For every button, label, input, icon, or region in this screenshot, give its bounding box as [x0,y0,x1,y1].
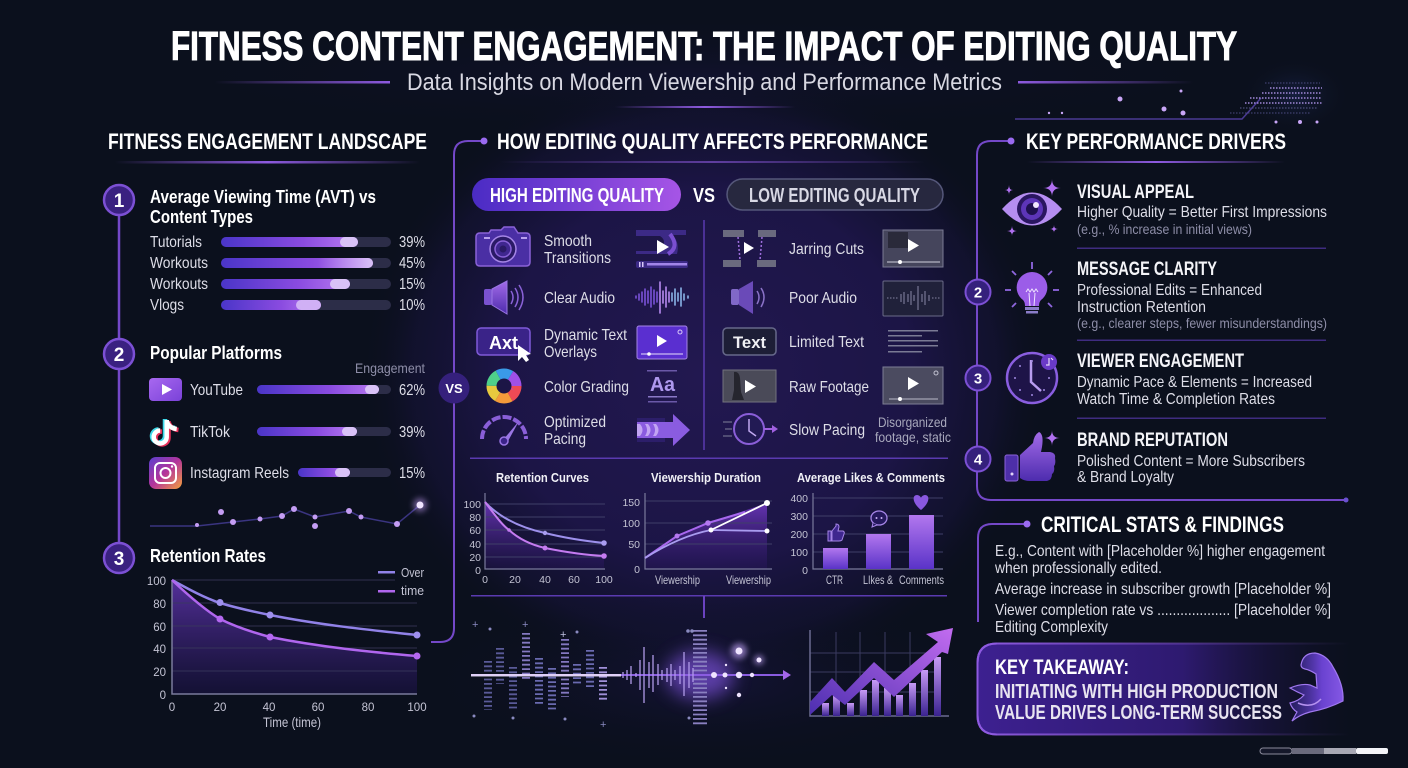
progress bar [1260,748,1388,754]
section: popular platforms: 15% [399,465,425,482]
chart: retention curves: 100 [595,574,613,586]
chart: retention curves: 80 [469,512,481,524]
section: popular platforms: Engagement [355,360,425,376]
text: stats: when professionally edited. [994,560,1162,577]
chart: retention rates: 0 [160,690,166,702]
chart: viewership duration: 150 [622,497,640,509]
icon: lightbulb [1005,262,1059,314]
chart: average likes and comments [790,470,945,587]
icon: tiktok [152,419,178,445]
badge: driver 4: 4 [974,452,983,468]
illustration: waveform: + [472,619,478,631]
section: popular platforms: TikTok [190,424,231,441]
section: average viewing time: Content Types [150,207,253,227]
panel: critical stats [978,512,1331,636]
chart: viewership duration: 0 [634,564,640,576]
icon: text overlay [477,328,531,362]
text: clear audio: Clear Audio [544,290,615,307]
icon: eye [1002,179,1062,236]
chart: viewership duration: Viewership [655,573,700,587]
panel: key takeaway [978,644,1350,734]
section: average viewing time: 10% [399,297,425,314]
chart: retention curves: 0 [475,565,481,577]
text: visual appeal [1077,182,1327,237]
icon: camera [476,227,530,266]
chart: viewership duration: Viewership [726,573,771,587]
chart: average likes and comments: 300 [790,511,808,523]
icon: instagram [149,457,182,489]
icon: color wheel [492,374,516,398]
chart: average likes and comments: 400 [790,493,808,505]
section: average viewing time: Vlogs [150,297,184,314]
text: raw footage: Raw Footage [789,379,869,396]
heading: editing quality: HOW EDITING QUALITY AFFECTS PERFORMANCE [497,129,928,154]
chart: average likes and comments: 100 [790,547,808,559]
badge: driver 3 [966,366,990,390]
chart: retention rates: 60 [312,702,324,714]
text: dynamic text overlays: Overlays [544,344,597,361]
pill: high editing quality [472,178,681,211]
chart: retention rates: 20 [153,667,166,679]
icon: gauge [482,417,526,445]
section: popular platforms: 62% [399,382,425,399]
icon: chat [871,511,887,527]
chart: retention rates: Time (time) [263,714,321,730]
icon: typography [647,370,677,402]
illustration: waveform: + [522,619,528,631]
chart: average likes and comments: 0 [802,565,808,577]
chart: average likes and comments: Comments [899,573,944,587]
chart: average likes and comments: LIkes & [863,573,893,587]
pill: low editing quality [727,179,943,210]
chart: average likes and comments: Average Likes & Comments [797,470,945,485]
icon: speaker [484,281,523,314]
connector: left to center [431,138,488,642]
text: smooth transitions: Smooth [544,233,592,250]
chart: retention curves: Retention Curves [496,470,589,485]
chart: retention curves: 40 [539,574,551,586]
panel: fitness engagement landscape [104,129,427,730]
icon: clock [1007,353,1057,403]
badge: vs: VS [445,381,463,396]
pill: high editing quality: HIGH EDITING QUALITY [490,185,664,207]
chart: retention rates: 100 [147,576,166,588]
illustration: waveform: + [560,629,566,641]
text: dynamic text overlays [544,327,627,361]
text: brand reputation: Polished Content = More Subscribers [1077,453,1305,470]
text: brand reputation: & Brand Loyalty [1077,469,1174,486]
text: message clarity: (e.g., clearer steps, fewer misunderstandings) [1077,315,1327,331]
icon: muscle [1290,653,1343,721]
text: message clarity: MESSAGE CLARITY [1077,259,1217,280]
text: limited text: Limited Text [789,334,864,351]
heading: retention rates: Retention Rates [150,546,266,566]
badge 3 [104,543,134,573]
text: stats: E.g., Content with [Placeholder %] higher engagement [995,543,1325,560]
icon: raw footage [723,370,776,402]
icon: heart [914,495,928,510]
badge 1 [104,185,134,215]
chart: retention rates: Over [401,565,425,580]
chart: retention rates: 0 [169,702,175,714]
icon: dull waveform [883,281,943,316]
chart: viewership duration: 100 [622,518,640,530]
chart: retention curves: 0 [482,574,488,586]
section: average viewing time: Average Viewing Time (AVT) vs [150,187,376,207]
badge 1: 1 [114,191,125,212]
text: color grading: Color Grading [544,379,629,396]
section: average viewing time: 45% [399,255,425,272]
section: popular platforms [149,343,425,489]
icon: typography: Aa [650,374,676,396]
icon: youtube [149,378,182,401]
chart: average likes and comments: CTR [826,573,843,587]
chart: retention curves: 40 [469,539,481,551]
text: visual appeal: Higher Quality = Better First Impressions [1077,204,1327,221]
text: disorganized footage: footage, static [875,429,951,445]
icon: dull speaker [731,281,764,314]
text: optimized pacing: Optimized [544,414,606,431]
section: popular platforms: Popular Platforms [150,343,282,363]
label: vs: VS [693,185,715,207]
text: stats: Editing Complexity [995,619,1108,636]
text: visual appeal: VISUAL APPEAL [1077,182,1194,203]
icon: thumbs up [1005,430,1060,481]
text: jarring cuts: Jarring Cuts [789,241,864,258]
heading: drivers: KEY PERFORMANCE DRIVERS [1026,129,1286,154]
text: disorganized footage [875,414,951,445]
text: brand reputation [1077,430,1305,486]
badge: vs [438,372,470,404]
pill: low editing quality: LOW EDITING QUALITY [749,185,920,207]
chart: average likes and comments: 200 [790,529,808,541]
illustration: growth chart [810,628,953,716]
chart: retention rates [147,565,427,730]
text: message clarity: Instruction Retention [1077,299,1206,316]
section: average viewing time [150,187,425,314]
text: visual appeal: (e.g., % increase in initial views) [1077,221,1252,237]
illustration: waveform: + [600,719,606,731]
text: viewer engagement: Watch Time & Completion Rates [1077,391,1275,408]
text: stats: Average increase in subscriber growth [Placeholder %] [995,581,1331,598]
section: average viewing time: Workouts [150,276,208,293]
column: high quality [476,227,690,448]
heading: critical stats: CRITICAL STATS & FINDINGS [1041,512,1284,537]
panel: editing quality [463,129,951,587]
chart: retention rates: 80 [153,599,166,611]
chart: retention rates: 100 [407,702,427,714]
text: takeaway [995,681,1282,724]
chart: viewership duration [622,470,772,587]
section: average viewing time: Workouts [150,255,208,272]
text: brand reputation: BRAND REPUTATION [1077,430,1228,451]
column: low quality [723,230,951,445]
heading: landscape: FITNESS ENGAGEMENT LANDSCAPE [108,129,427,154]
icon: speed arrow [637,414,690,446]
chart: viewership duration: Viewership Duration [651,470,761,485]
badge 2: 2 [114,345,124,366]
icon: text lines [888,330,938,352]
text: poor audio: Poor Audio [789,290,857,307]
chart: retention rates: 80 [362,702,374,714]
section: popular platforms: 39% [399,424,425,441]
badge: driver 4 [966,446,990,472]
text: takeaway: INITIATING WITH HIGH PRODUCTION [995,681,1278,703]
text: smooth transitions: Transitions [544,250,611,267]
text: stats [994,543,1331,636]
text: slow pacing: Slow Pacing [789,422,865,439]
badge: driver 2: 2 [974,284,982,302]
sparkline [150,498,427,529]
text: message clarity [1077,259,1327,331]
chart: retention rates: 20 [214,702,226,714]
icon: raw video [883,230,943,267]
text: optimized pacing [544,414,606,448]
chart: retention rates: 40 [153,644,166,656]
badge: driver 2 [966,280,990,304]
badge 3: 3 [114,549,124,570]
text: stats: Viewer completion rate vs ................... [Placeholder %] [995,602,1331,619]
text: viewer engagement: VIEWER ENGAGEMENT [1077,351,1244,372]
text: disorganized footage: Disorganized [878,414,947,430]
chart: viewership duration: 50 [628,539,640,551]
heading: key takeaway: KEY TAKEAWAY: [995,656,1129,679]
icon: limited text bubble [723,328,776,355]
icon: limited text bubble: Text [733,333,766,352]
icon: jarring cuts [723,230,776,267]
chart: retention curves [463,470,613,586]
icon: text overlay: Axt [489,333,518,353]
chart: retention rates: 60 [153,622,166,634]
icon: static video [883,367,943,404]
icon: like [828,524,844,541]
badge 2 [104,339,134,369]
chart: retention rates: time [401,583,424,598]
text: takeaway: VALUE DRIVES LONG-TERM SUCCESS [995,702,1282,724]
section: average viewing time: 15% [399,276,425,293]
badge: driver 3: 3 [974,370,982,388]
text: viewer engagement [1077,351,1312,408]
text: optimized pacing: Pacing [544,431,586,448]
section: average viewing time: Tutorials [150,234,202,251]
icon: transition clip [636,230,688,268]
chart: retention curves: 60 [568,574,580,586]
illustration: waveform [471,619,791,731]
icon: slow clock [723,414,778,444]
section: popular platforms: YouTube [190,382,243,399]
icon: player [637,326,687,359]
connector: drivers [977,138,1348,502]
subtitle: Data Insights on Modern Viewership and Performance Metrics [407,69,1002,96]
section: average viewing time: 39% [399,234,425,251]
text: viewer engagement: Dynamic Pace & Elements = Increased [1077,374,1312,391]
text: smooth transitions [544,233,611,267]
decoration: circuit dots [1015,83,1322,124]
panel: key performance drivers [966,129,1348,502]
text: dynamic text overlays: Dynamic Text [544,327,627,344]
chart: retention curves: 100 [463,499,481,511]
chart: retention curves: 20 [509,574,521,586]
chart: retention curves: 20 [469,552,481,564]
section: popular platforms: Instagram Reels [190,465,289,482]
chart: retention rates: 40 [263,702,275,714]
icon: waveform [636,282,688,313]
text: message clarity: Professional Edits = Enhanced [1077,282,1262,299]
chart: retention curves: 60 [469,525,481,537]
